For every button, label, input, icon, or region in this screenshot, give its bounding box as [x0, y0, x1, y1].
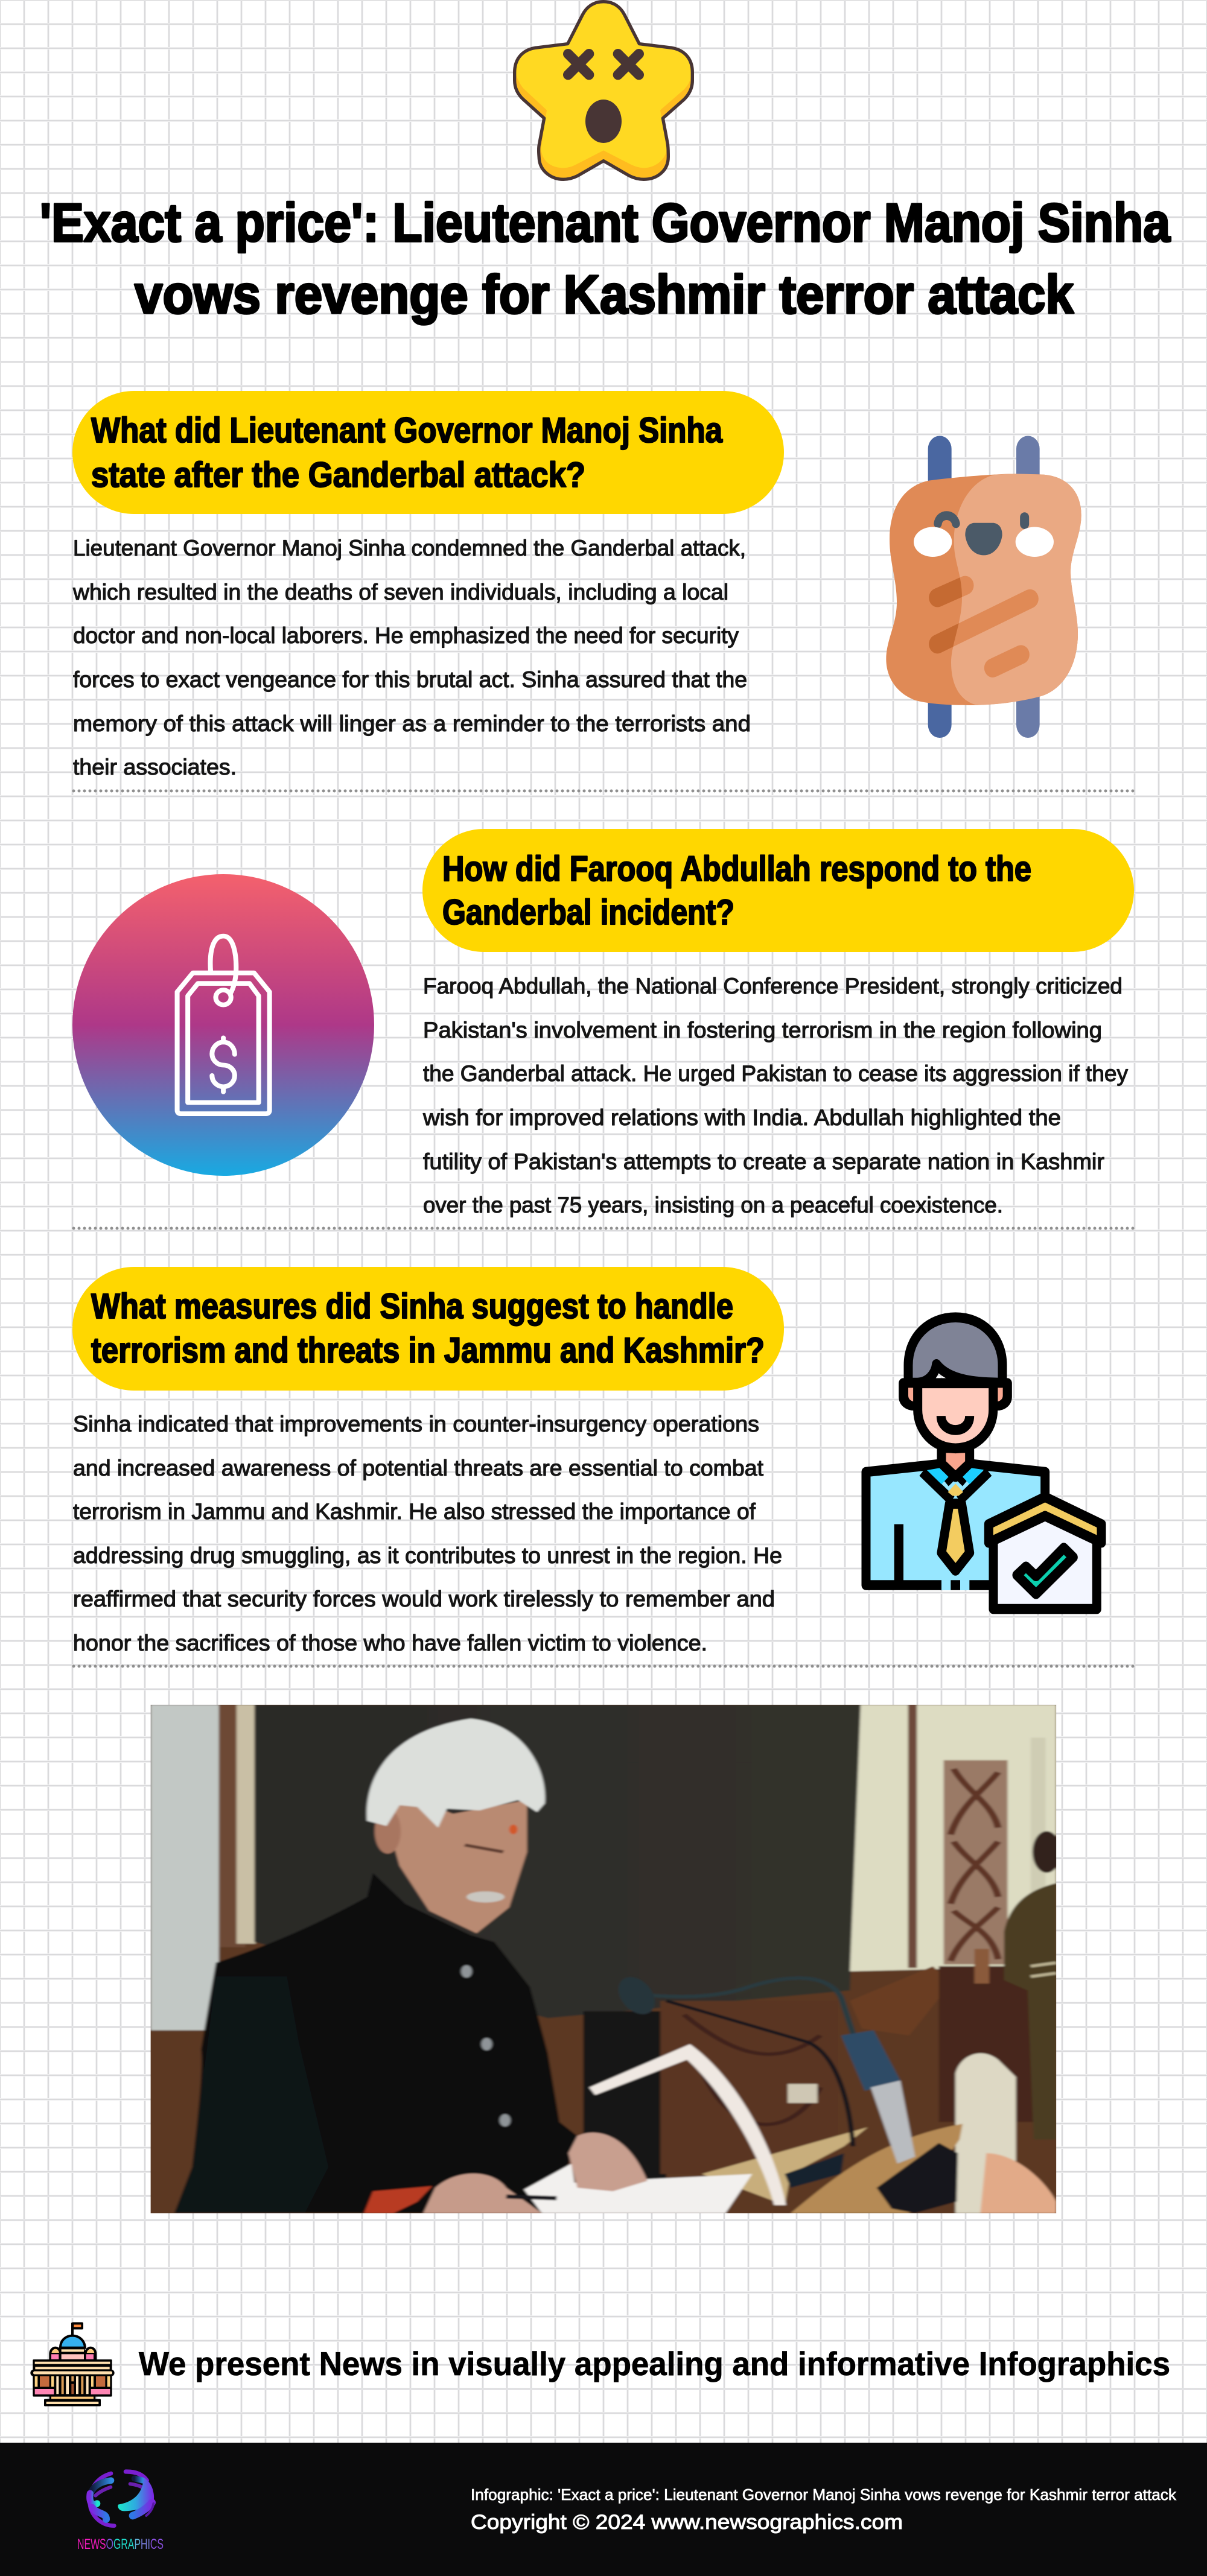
tagline: We present News in visually appealing and informative Infographics: [139, 2345, 1170, 2382]
heading: Farooq Abdullah response: Ganderbal incident?: [442, 893, 734, 932]
footer caption: Infographic: 'Exact a price': Lieutenant Governor Manoj Sinha vows revenge for Kashmir terror attack: [471, 2486, 1177, 2504]
text block: Sinha statement: forces to exact vengeance for this brutal act. Sinha assured that the: [73, 667, 747, 692]
text block: Farooq Abdullah response: Farooq Abdullah, the National Conference President, strongly criticized: [423, 974, 1123, 998]
heading: Sinha statement: [72, 391, 784, 514]
text block: Farooq Abdullah response: wish for improved relations with India. Abdullah highlighted the: [422, 1105, 1061, 1130]
footer band: [0, 2443, 1207, 2576]
text block: Farooq Abdullah response: over the past 75 years, insisting on a peaceful coexistence.: [423, 1193, 1003, 1217]
panel: Sinha statement: [72, 391, 1081, 779]
icon: parliament building: [30, 2322, 115, 2406]
icon: shocked star: [515, 2, 692, 179]
panel: measures against terrorism: [72, 1267, 1101, 1655]
text block: measures against terrorism: and increased awareness of potential threats are essential to combat: [73, 1456, 764, 1480]
text block: Sinha statement: [72, 536, 751, 779]
heading: Farooq Abdullah response: How did Farooq Abdullah respond to the: [442, 849, 1031, 889]
text block: Farooq Abdullah response: the Ganderbal attack. He urged Pakistan to cease its aggression if they: [423, 1061, 1128, 1086]
text block: measures against terrorism: addressing drug smuggling, as it contributes to unrest in the region. He: [73, 1543, 782, 1568]
logo wordmark: NEWSOGRAPHICS: [77, 2536, 164, 2552]
logo: Newsographics globe: [90, 2472, 154, 2526]
heading: Sinha statement: What did Lieutenant Governor Manoj Sinha: [91, 411, 723, 450]
text block: Sinha statement: their associates.: [73, 755, 237, 779]
heading: measures against terrorism: [72, 1267, 784, 1391]
text block: Sinha statement: which resulted in the deaths of seven individuals, including a local: [72, 580, 728, 604]
icon: skewer character: [886, 436, 1081, 738]
text block: measures against terrorism: reaffirmed that security forces would work tirelessly to remember and: [73, 1587, 775, 1611]
text block: measures against terrorism: terrorism in Jammu and Kashmir. He also stressed the importance of: [73, 1499, 756, 1524]
text block: measures against terrorism: honor the sacrifices of those who have fallen victim to violence.: [73, 1631, 707, 1655]
photo: Manoj Sinha at podium: [151, 1705, 1056, 2213]
text block: Sinha statement: memory of this attack will linger as a reminder to the terrorists and: [73, 711, 751, 736]
heading: measures against terrorism: What measures did Sinha suggest to handle: [91, 1287, 733, 1326]
text block: Sinha statement: doctor and non-local laborers. He emphasized the need for security: [73, 623, 739, 648]
text block: Sinha statement: Lieutenant Governor Manoj Sinha condemned the Ganderbal attack,: [73, 536, 746, 560]
panel: Farooq Abdullah response: [72, 829, 1134, 1217]
icon: officer with house check: [866, 1318, 1101, 1609]
heading: Sinha statement: state after the Ganderbal attack?: [91, 455, 585, 495]
text block: measures against terrorism: [73, 1412, 782, 1655]
text block: Farooq Abdullah response: futility of Pakistan's attempts to create a separate nation in Kashmir: [423, 1149, 1104, 1174]
title: [40, 193, 1171, 325]
text block: Farooq Abdullah response: [422, 974, 1128, 1217]
title: vows revenge for Kashmir terror attack: [135, 265, 1074, 325]
icon: price tag in gradient circle: [72, 874, 374, 1176]
heading: measures against terrorism: terrorism and threats in Jammu and Kashmir?: [91, 1331, 765, 1370]
heading: Farooq Abdullah response: [422, 829, 1134, 952]
text block: measures against terrorism: Sinha indicated that improvements in counter-insurgency operations: [73, 1412, 759, 1436]
text block: Farooq Abdullah response: Pakistan's involvement in fostering terrorism in the region following: [423, 1018, 1102, 1042]
copyright: Copyright © 2024 www.newsographics.com: [471, 2511, 903, 2534]
